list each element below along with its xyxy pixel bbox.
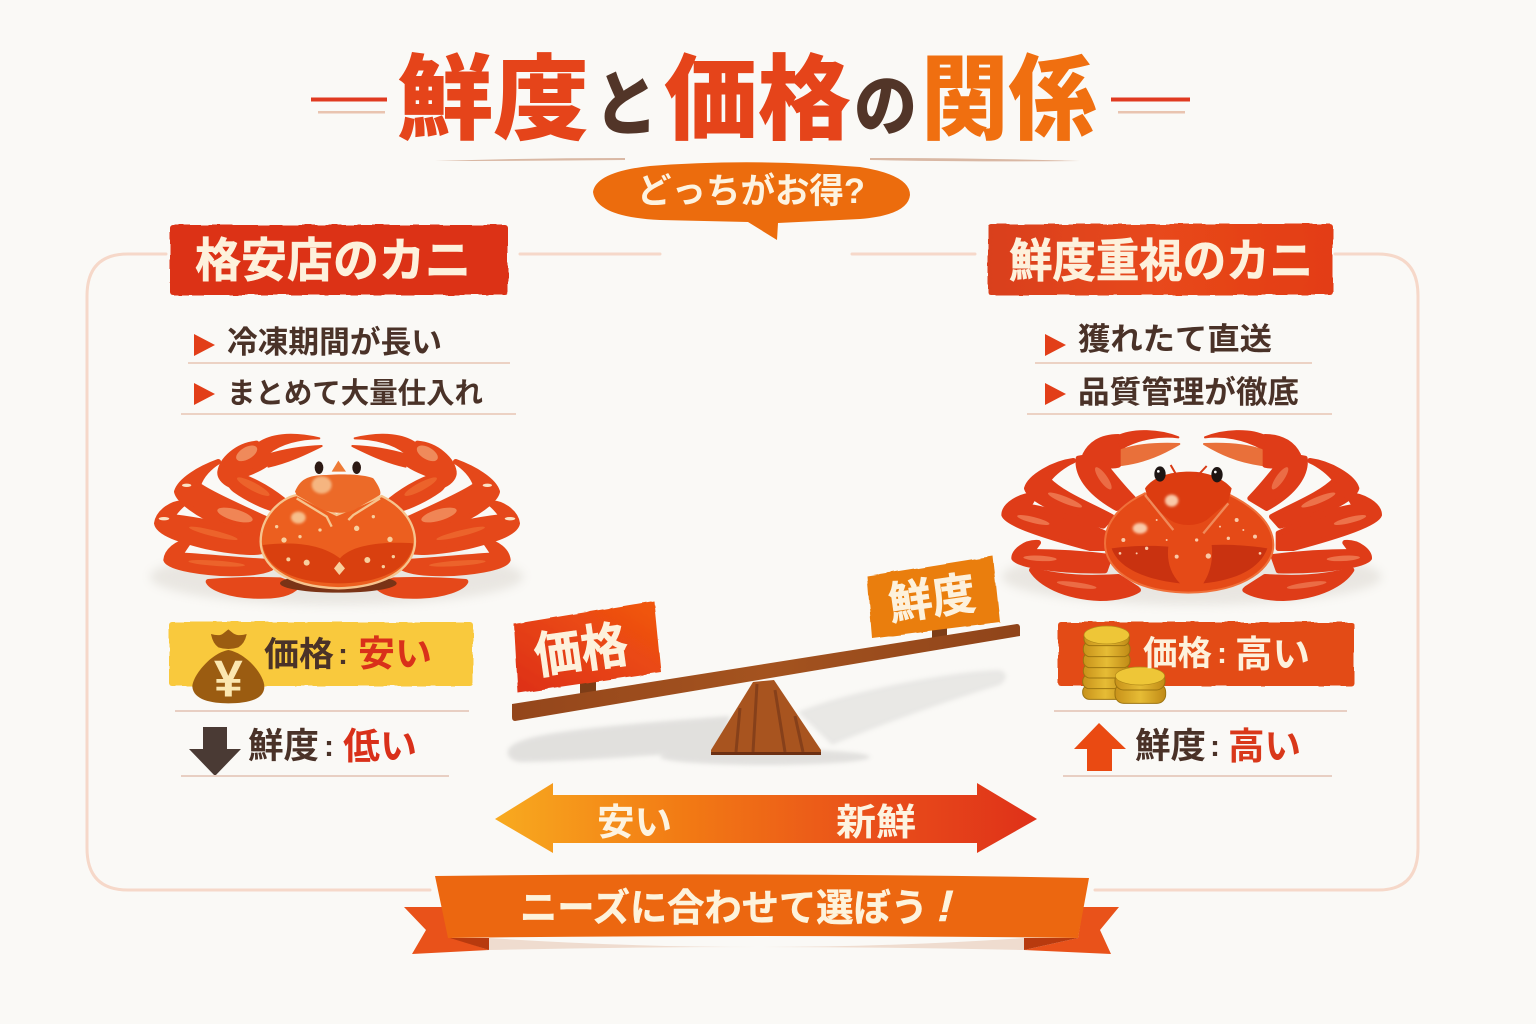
ribbon body: [435, 874, 1089, 938]
crab shell left: [261, 461, 415, 593]
right column: fresh crab: [988, 224, 1382, 777]
title text: 価格: [664, 48, 851, 152]
title text: と: [594, 66, 658, 146]
price tag: 価格 安い: :: [338, 638, 348, 671]
panel outline: comparison frame: [87, 254, 1418, 890]
header ribbon: 鮮度重視のカニ: 鮮度重視のカニ: [1009, 235, 1313, 287]
ribbon text: !: [933, 883, 959, 931]
bullet list left: 冷凍期間が長い: [227, 325, 442, 360]
freshness row: 鮮度 高い: 鮮度: [1135, 727, 1206, 766]
ribbon text: ニーズに合わせて選ぼう: [520, 887, 928, 930]
title text: の: [854, 69, 917, 145]
freshness row: 鮮度 高い: :: [1210, 730, 1220, 763]
title text: 鮮度: [397, 48, 589, 152]
ribbon tails: [404, 907, 1119, 954]
seesaw beam: [512, 624, 1020, 721]
bullet list right: 獲れたて直送: [1078, 322, 1272, 357]
title text: [397, 48, 1096, 152]
sign: 鮮度: [867, 556, 1000, 641]
bullet list left: [181, 325, 516, 415]
title: [311, 48, 1190, 161]
left column: budget crab: [150, 225, 523, 777]
crab illustration left: [150, 435, 523, 605]
speech bubble: どっちがお得？: どっちがお得?: [637, 172, 865, 211]
crab illustration right: [1002, 431, 1382, 605]
crab legs right: [1004, 431, 1379, 598]
seesaw fulcrum: [711, 680, 821, 755]
header ribbon: 格安店のカニ: 格安店のカニ: [195, 234, 471, 287]
price tag: 価格 安い: 価格: [264, 636, 334, 674]
price tag: 価格 高い: 価格: [1143, 635, 1212, 673]
seesaw shadows: [508, 670, 1006, 765]
title text: 関係: [921, 48, 1096, 152]
icon: yen money bag: [192, 629, 264, 708]
freshness row: 鮮度 低い: 低い: [343, 726, 417, 767]
header ribbon: 鮮度重視のカニ: [988, 224, 1333, 295]
speech bubble: どっちがお得？: [593, 162, 910, 240]
price tag: 価格 安い: [169, 622, 473, 712]
icon: down arrow: [189, 727, 241, 776]
header ribbon: 格安店のカニ: [170, 225, 508, 295]
gradient double arrow: 安い 新鮮: [495, 783, 1037, 853]
title decoration lines: [311, 98, 1190, 161]
freshness row: 鮮度 低い: 鮮度: [248, 727, 319, 766]
icon: up arrow: [1074, 723, 1126, 771]
icon: yen money bag: ¥: [214, 650, 243, 708]
sign: 価格: [514, 601, 661, 698]
bullet list right: [1027, 322, 1332, 415]
bottom ribbon banner: [404, 874, 1119, 954]
sign: 価格: 価格: [531, 616, 632, 685]
crab legs left: [157, 435, 517, 596]
price tag: 価格 高い: 高い: [1235, 634, 1310, 675]
icon: gold coin stacks: [1083, 626, 1166, 703]
crab shell right: [1105, 465, 1273, 593]
gradient double arrow: 安い 新鮮: 安い: [597, 802, 672, 843]
sign: 鮮度: 鮮度: [885, 567, 979, 630]
bullet list left: まとめて大量仕入れ: [227, 377, 483, 410]
freshness row: 鮮度 低い: :: [324, 730, 334, 763]
gradient double arrow: 安い 新鮮: 新鮮: [836, 802, 916, 843]
price tag: 価格 安い: 安い: [358, 633, 432, 674]
bullet list right: 品質管理が徹底: [1078, 375, 1299, 410]
price tag: 価格 高い: :: [1217, 637, 1227, 670]
price tag: 価格 高い: [1054, 622, 1354, 712]
freshness row: 鮮度 低い: [181, 726, 449, 777]
freshness row: 鮮度 高い: [1063, 723, 1332, 777]
freshness row: 鮮度 高い: 高い: [1228, 726, 1301, 767]
seesaw: price versus freshness: [508, 556, 1020, 765]
